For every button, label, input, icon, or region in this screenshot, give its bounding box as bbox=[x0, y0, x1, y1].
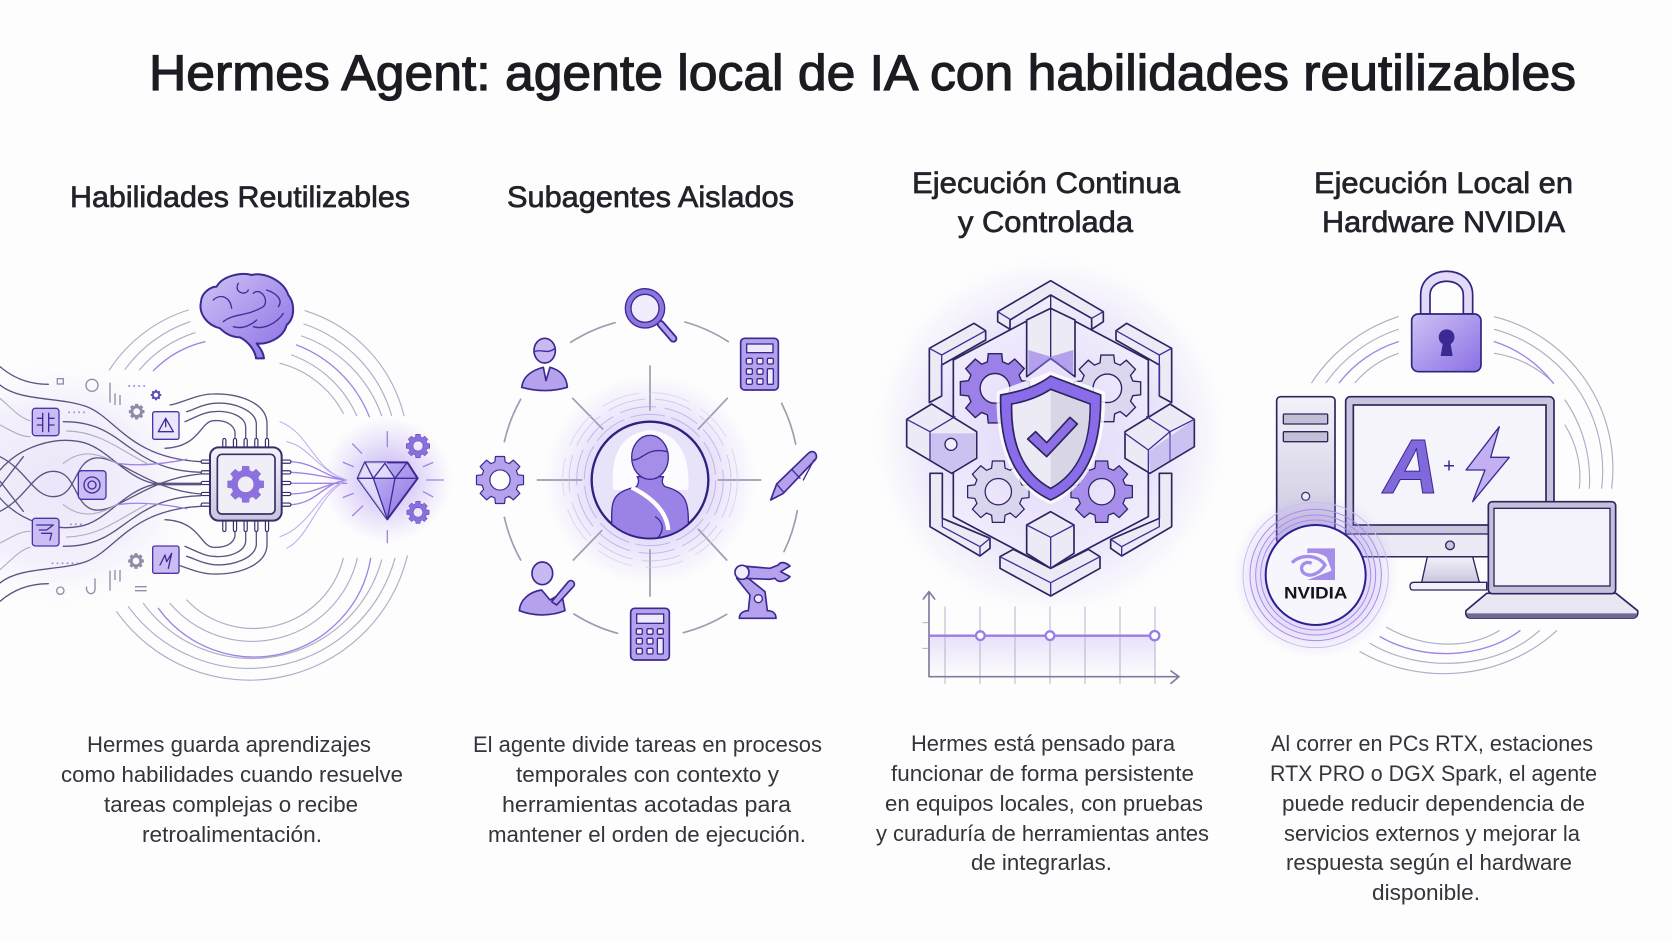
heading: ejecución local en hardware nvidia: Hardware NVIDIA bbox=[1322, 206, 1565, 239]
uptime line chart bbox=[922, 592, 1179, 684]
shield with check bbox=[997, 372, 1105, 504]
fan lines to diamond bbox=[280, 422, 347, 548]
icon: laptop bbox=[1466, 502, 1638, 618]
description: ejecución continua: de integrarlas. bbox=[971, 850, 1112, 875]
corner brackets bbox=[929, 281, 1172, 596]
hub spokes and ring bbox=[504, 322, 797, 633]
description: ejecución local: puede reducir dependencia de bbox=[1282, 791, 1585, 816]
icon: robot arm bbox=[735, 563, 790, 618]
description: subagentes aislados: El agente divide tareas en procesos bbox=[473, 732, 822, 757]
description: habilidades reutilizables: retroalimentación. bbox=[142, 822, 322, 847]
icon: diamond bbox=[343, 432, 443, 543]
title: Hermes Agent: agente local de IA con habilidades reutilizables bbox=[149, 45, 1576, 101]
heading: ejecución continua y controlada: y Controlada bbox=[958, 206, 1133, 239]
panel: ejecución continua bbox=[873, 167, 1227, 875]
top block bbox=[1027, 295, 1075, 377]
description: ejecución continua: y curaduría de herramientas antes bbox=[876, 821, 1209, 846]
heading: ejecución continua y controlada: Ejecución Continua bbox=[912, 167, 1180, 200]
description: ejecución local: RTX PRO o DGX Spark, el agente bbox=[1270, 761, 1597, 786]
description: subagentes aislados bbox=[473, 732, 822, 847]
screen text: plus: + bbox=[1443, 455, 1455, 478]
description: ejecución local: disponible. bbox=[1372, 880, 1480, 905]
heading: subagentes aislados: Subagentes Aislados bbox=[507, 181, 794, 214]
description: ejecución continua bbox=[876, 731, 1209, 875]
icon: person top left bbox=[522, 338, 567, 391]
gears bbox=[960, 354, 1141, 522]
nvidia badge bbox=[1232, 492, 1399, 658]
icon: magnifier bbox=[625, 289, 673, 339]
icon: monitor bbox=[1346, 397, 1554, 590]
description: habilidades reutilizables bbox=[61, 732, 403, 847]
description: ejecución local: Al correr en PCs RTX, estaciones bbox=[1271, 731, 1593, 756]
icon: gear bbox=[476, 456, 524, 504]
icons: tool squares bbox=[32, 408, 179, 573]
inner hexagon bbox=[953, 308, 1148, 568]
description: habilidades reutilizables: como habilidades cuando resuelve bbox=[61, 762, 403, 787]
panel: habilidades reutilizables bbox=[0, 181, 452, 847]
icon: small gears bbox=[406, 434, 430, 523]
description: ejecución local bbox=[1270, 731, 1597, 905]
icon: lightning bolt bbox=[1466, 427, 1509, 502]
ripples bbox=[563, 393, 737, 567]
illustration: local hardware bbox=[1232, 271, 1638, 674]
description: subagentes aislados: mantener el orden de ejecución. bbox=[488, 822, 806, 847]
signal arcs bbox=[1312, 317, 1613, 674]
nvidia wordmark: NVIDIA bbox=[1284, 584, 1347, 603]
description: habilidades reutilizables: Hermes guarda aprendizajes bbox=[87, 732, 371, 757]
illustration: agent hub bbox=[476, 289, 816, 660]
central agent bbox=[592, 422, 708, 543]
description: ejecución continua: funcionar de forma persistente bbox=[891, 761, 1194, 786]
icon: padlock bbox=[1412, 271, 1481, 372]
heading: ejecución local en hardware nvidia bbox=[1314, 167, 1573, 239]
illustration: brain, chip and diamond bbox=[0, 274, 452, 680]
data wires bbox=[0, 367, 267, 601]
screen text: A: A bbox=[1381, 424, 1439, 510]
heading: habilidades reutilizables: Habilidades Reutilizables bbox=[70, 181, 410, 214]
icon: calculator bottom bbox=[631, 608, 669, 660]
description: subagentes aislados: temporales con contexto y bbox=[516, 762, 779, 787]
small glyphs bbox=[52, 379, 161, 594]
panel: ejecución local bbox=[1232, 167, 1638, 905]
cubes bbox=[907, 404, 1194, 568]
description: ejecución continua: Hermes está pensado para bbox=[911, 731, 1176, 756]
description: ejecución local: servicios externos y mejorar la bbox=[1284, 821, 1581, 846]
icon: chip with gear bbox=[203, 440, 289, 530]
description: ejecución local: respuesta según el hardware bbox=[1286, 850, 1572, 875]
icon: calculator top bbox=[741, 338, 778, 390]
description: ejecución continua: en equipos locales, con pruebas bbox=[885, 791, 1203, 816]
description: subagentes aislados: herramientas acotadas para bbox=[502, 792, 792, 817]
icon: person with pencil bbox=[519, 562, 574, 615]
illustration: shield hexagon bbox=[873, 257, 1227, 617]
icon: brain bbox=[201, 274, 293, 358]
description: habilidades reutilizables: tareas complejas o recibe bbox=[104, 792, 358, 817]
icon: desktop tower bbox=[1277, 397, 1335, 543]
heading: ejecución continua y controlada bbox=[912, 167, 1180, 239]
panel: subagentes aislados bbox=[473, 181, 822, 847]
heading: ejecución local en hardware nvidia: Ejecución Local en bbox=[1314, 167, 1573, 200]
icon: pen bbox=[771, 452, 816, 500]
icon: nvidia eye bbox=[1289, 548, 1335, 580]
